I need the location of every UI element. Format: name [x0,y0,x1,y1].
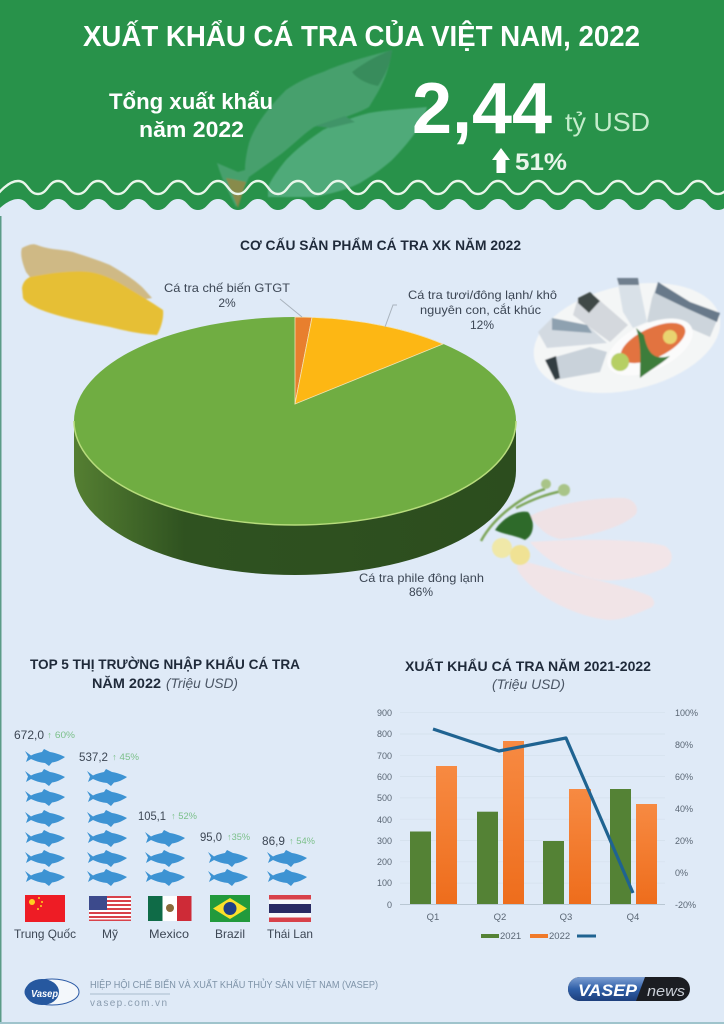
pie label: frozen fillet: 86% [409,585,433,599]
right axis [675,708,698,910]
total export label [109,89,273,142]
quarter labels: Q2 [494,912,506,923]
growth 51%: 51% [515,149,567,176]
gridlines and left axis: 300 [377,836,392,846]
pie label: whole fresh frozen: 12% [470,318,494,332]
market column: USA: Mỹ [102,927,118,941]
gridlines and left axis: 700 [377,751,392,761]
combo chart [377,708,698,942]
gridlines and left axis: 900 [377,708,392,718]
pie label: whole fresh frozen: Cá tra tươi/đông lạnh/ khô [408,288,557,302]
market column: China: Trung Quốc [14,927,76,941]
header fish illustration [217,50,427,208]
pie chart [74,317,516,575]
gridlines and left axis: 200 [377,857,392,867]
pie label: value-added: Cá tra chế biến GTGT [164,281,291,295]
bars 2022 [436,741,657,904]
market column: Thailand: ↑ 54% [289,836,315,846]
title: XUẤT KHẨU CÁ TRA CỦA VIỆT NAM, 2022 [83,20,640,53]
gridlines and left axis: 500 [377,793,392,803]
heading: top 5 markets: TOP 5 THỊ TRƯỜNG NHẬP KHẨU CÁ TRA [30,655,300,672]
heading: top 5 markets [30,655,300,691]
right axis: 20% [675,836,693,846]
quarter labels: Q3 [560,912,572,923]
market column: China: 672,0 [14,728,44,742]
footer text [90,978,378,1009]
market column: Thailand: Thái Lan [267,927,313,941]
market column: USA: 537,2 [79,750,108,764]
image: breaded fillets [21,244,163,335]
gridlines and left axis: 400 [377,815,392,825]
total export value: tỷ USD [565,107,650,137]
footer text: vasep.com.vn [90,998,167,1009]
growth 51% [492,148,567,176]
VASEP news badge: news [647,983,686,1000]
footer logo: Vasep [31,989,58,1000]
legend: 2022 [549,931,570,942]
growth line [433,729,633,893]
total export label: Tổng xuất khẩu [109,89,273,114]
legend: 2021 [500,931,521,942]
pie label: whole fresh frozen: nguyên con, cắt khúc [420,302,541,317]
footer logo [25,979,79,1005]
market column: Thailand [262,834,315,941]
gridlines and left axis: 0 [387,900,392,910]
pie label: value-added [164,281,302,317]
market column: Thailand: 86,9 [262,834,285,848]
heading: 2021-2022 exports [405,657,651,692]
heading: product structure: CƠ CẤU SẢN PHẨM CÁ TRA XK NĂM 2022 [240,238,521,253]
heading: top 5 markets: (Triệu USD) [166,675,238,691]
image: white fillets with herbs [481,479,672,620]
right axis: 0% [675,868,688,878]
market column: China: ↑ 60% [47,730,75,740]
total export label: năm 2022 [139,117,244,142]
image: fish steaks plate [523,266,724,410]
market column: Mexico: 105,1 [138,809,166,823]
heading: 2021-2022 exports: (Triệu USD) [492,676,565,692]
pie label: value-added: 2% [218,296,236,310]
heading: 2021-2022 exports: XUẤT KHẨU CÁ TRA NĂM 2021-2022 [405,657,651,674]
total export value: 2,44 [412,69,552,149]
legend [481,931,596,942]
footer text: HIỆP HỘI CHẾ BIẾN VÀ XUẤT KHẨU THỦY SẢN VIỆT NAM (VASEP) [90,978,378,991]
market column: Mexico: ↑ 52% [171,811,197,821]
VASEP news badge: VASEP [578,981,638,1000]
market column: USA [79,750,139,941]
market column: Mexico: Mexico [149,927,189,941]
wave line [0,181,724,194]
right axis: 40% [675,804,693,814]
bars 2021 [410,789,631,904]
market column: Brazil: 95,0 [200,830,222,844]
market column: Brazil: Brazil [215,927,245,941]
right axis: 100% [675,708,698,718]
gridlines and left axis: 600 [377,772,392,782]
total export value [412,69,650,149]
pie label: frozen fillet: Cá tra phile đông lạnh [359,571,484,585]
quarter labels [427,912,639,923]
right axis: 60% [675,772,693,782]
market column: China [14,728,76,941]
gridlines and left axis: 800 [377,729,392,739]
VASEP news badge [568,977,690,1001]
market column: Mexico [138,809,197,941]
market column: Brazil [200,830,250,941]
market column: USA: ↑ 45% [112,752,139,762]
pie label: frozen fillet [359,571,484,599]
heading: top 5 markets: NĂM 2022 [92,675,161,691]
market column: Brazil: ↑35% [227,832,250,842]
right axis: -20% [675,900,696,910]
quarter labels: Q4 [627,912,639,923]
right axis: 80% [675,740,693,750]
gridlines and left axis [377,708,665,910]
gridlines and left axis: 100 [377,878,392,888]
header band [0,0,724,216]
quarter labels: Q1 [427,912,439,923]
pie label: whole fresh frozen [385,288,557,332]
